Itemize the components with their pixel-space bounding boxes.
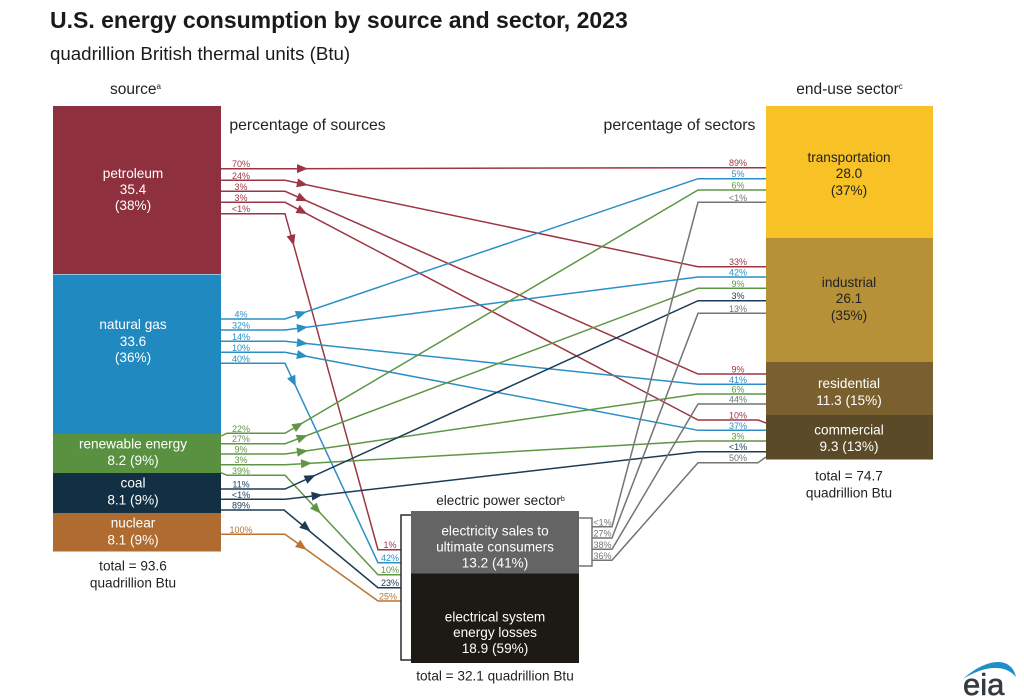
block: transportation: (37%) xyxy=(831,183,867,198)
flow: renewable to residential xyxy=(221,384,766,457)
flow: electricity to transportation: <1% xyxy=(593,517,612,527)
source total: total = 93.6 xyxy=(99,559,167,574)
flow: coal to commercial: <1% xyxy=(232,490,250,500)
flow: petroleum to residential xyxy=(221,182,766,374)
flow: gas to electric power: 40% xyxy=(232,354,250,364)
flow: gas to transportation: 5% xyxy=(731,169,745,179)
block: electrical system energy losses: electrical system xyxy=(445,610,545,624)
flow: electricity to industrial: 27% xyxy=(593,528,612,538)
flow: petroleum to transportation: 70% xyxy=(232,159,250,169)
subtitle: quadrillion British thermal units (Btu) xyxy=(50,43,350,64)
block: natural gas: natural gas xyxy=(99,317,167,332)
block: petroleum: petroleum xyxy=(103,166,163,181)
flow: gas to residential: 14% xyxy=(232,332,250,342)
flow: electricity to industrial xyxy=(592,304,766,538)
block: residential: 11.3 (15%) xyxy=(816,393,882,408)
flow: coal to commercial xyxy=(221,442,766,501)
flow: gas to residential: 41% xyxy=(729,375,747,385)
block: electricity sales: 13.2 (41%) xyxy=(462,556,528,571)
flow: coal to electric power xyxy=(221,500,401,588)
electric power sector heading: b xyxy=(561,496,565,503)
flow: coal to electric power: 23% xyxy=(381,578,399,588)
bracket: electricity sales outflow xyxy=(579,518,592,566)
block: residential: residential xyxy=(818,376,880,391)
block: commercial xyxy=(766,415,933,460)
flow: electricity to industrial: 13% xyxy=(729,304,747,314)
flow: renewable to transportation: 22% xyxy=(232,424,250,434)
flow: coal to electric power: 89% xyxy=(232,500,250,510)
block: industrial: 26.1 xyxy=(836,291,862,306)
flow: petroleum to commercial: 10% xyxy=(729,410,747,420)
flow: gas to industrial: 42% xyxy=(729,268,747,278)
flows: renewable energy xyxy=(221,180,766,575)
flow: petroleum to transportation: 89% xyxy=(729,158,747,168)
flow: electricity to transportation xyxy=(592,193,766,527)
flow: coal to commercial: <1% xyxy=(729,442,747,452)
flow: nuclear to electric power: 25% xyxy=(379,592,397,602)
block: nuclear xyxy=(53,513,221,552)
block: transportation: transportation xyxy=(807,150,891,165)
flow: petroleum to transportation xyxy=(221,158,766,173)
block: industrial xyxy=(766,238,933,362)
block: natural gas xyxy=(53,274,221,434)
flow: gas to industrial xyxy=(221,268,766,333)
block: electrical system energy losses: energy losses xyxy=(453,625,537,640)
flows: electricity sales to sectors xyxy=(579,193,766,566)
flow: gas to commercial xyxy=(221,343,766,431)
block: electrical system energy losses xyxy=(411,574,579,663)
block: renewable energy xyxy=(53,434,221,473)
flow: petroleum to electric power: <1% xyxy=(232,204,250,214)
flow: electricity to transportation: <1% xyxy=(729,193,747,203)
end-use sector column heading: c xyxy=(899,82,903,91)
flow: renewable to residential: 9% xyxy=(234,444,248,454)
flow: petroleum to electric power: 1% xyxy=(383,540,397,550)
flow: petroleum to industrial: 33% xyxy=(729,257,747,267)
block: electricity sales: ultimate consumers xyxy=(436,540,554,555)
source total: quadrillion Btu xyxy=(90,575,176,590)
bracket: electric power sector inflow xyxy=(401,515,411,660)
flow: coal to industrial: 3% xyxy=(731,291,745,301)
block: petroleum: 35.4 xyxy=(120,182,147,197)
source column heading: a xyxy=(157,82,162,91)
block: commercial: 9.3 (13%) xyxy=(820,439,878,454)
panel: electric power sector xyxy=(411,511,579,663)
block: electricity sales xyxy=(411,511,579,574)
flow: renewable to transportation: 6% xyxy=(731,180,745,190)
flow: petroleum to electric power xyxy=(221,204,401,550)
flow: renewable to commercial: 3% xyxy=(731,432,745,442)
block: renewable energy: renewable energy xyxy=(79,436,187,451)
panel: source blocks xyxy=(53,106,221,552)
block: commercial: commercial xyxy=(814,422,884,437)
flow: electricity to commercial: 50% xyxy=(729,453,747,463)
block: renewable energy: 8.2 (9%) xyxy=(107,453,159,468)
flow: renewable to residential: 6% xyxy=(731,384,745,394)
flow: renewable to industrial: 9% xyxy=(731,279,745,289)
flow: electricity to commercial xyxy=(592,453,766,561)
block: industrial: industrial xyxy=(822,275,876,290)
flow: petroleum to commercial xyxy=(221,193,766,423)
flow: electricity to residential: 44% xyxy=(729,394,747,404)
source column heading: source xyxy=(110,81,157,98)
flow: renewable to industrial xyxy=(221,279,766,444)
flow: electricity to residential: 38% xyxy=(593,540,612,550)
block: coal xyxy=(53,473,221,513)
flow: coal to industrial xyxy=(221,291,766,490)
flow: renewable to industrial: 27% xyxy=(232,434,250,444)
end-use total: total = 74.7 xyxy=(815,469,883,484)
block: industrial: (35%) xyxy=(831,308,867,323)
block: residential xyxy=(766,362,933,415)
block: petroleum: (38%) xyxy=(115,198,151,213)
block: nuclear: nuclear xyxy=(111,516,156,531)
flow: renewable to electric power: 10% xyxy=(381,565,399,575)
block: transportation xyxy=(766,106,933,238)
flow: nuclear to electric power xyxy=(221,525,401,602)
block: electrical system energy losses: 18.9 (59%) xyxy=(462,641,528,656)
flows: petroleum xyxy=(221,158,766,550)
flow: gas to residential xyxy=(221,332,766,385)
flow: gas to electric power: 42% xyxy=(381,553,399,563)
flow: petroleum to industrial xyxy=(221,171,766,267)
flow: renewable to transportation xyxy=(221,180,766,436)
block: transportation: 28.0 xyxy=(836,166,863,181)
block: natural gas: (36%) xyxy=(115,350,151,365)
percentage of sources heading: percentage of sources xyxy=(229,117,386,134)
flow: electricity to commercial: 36% xyxy=(593,551,612,561)
flow: renewable to commercial xyxy=(221,432,766,468)
electric power total: total = 32.1 quadrillion Btu xyxy=(416,668,574,684)
flow: gas to electric power xyxy=(221,354,401,563)
flow: renewable to commercial: 3% xyxy=(234,455,248,465)
flow: petroleum to industrial: 24% xyxy=(232,171,250,181)
flow: petroleum to residential: 3% xyxy=(234,182,248,192)
block: coal: 8.1 (9%) xyxy=(107,493,159,508)
flow: gas to transportation xyxy=(221,169,766,320)
block: nuclear: 8.1 (9%) xyxy=(107,532,159,547)
flow: gas to commercial: 37% xyxy=(729,421,747,431)
flow: petroleum to residential: 9% xyxy=(731,364,745,374)
block: petroleum xyxy=(53,106,221,274)
flow: renewable to electric power xyxy=(221,466,401,575)
panel: end-use sector blocks xyxy=(766,106,933,460)
flows: natural gas xyxy=(221,169,766,563)
icon: eia logo xyxy=(963,662,1016,700)
block: coal: coal xyxy=(121,476,145,491)
flow: electricity to residential xyxy=(592,394,766,550)
block: electricity sales: electricity sales to xyxy=(441,524,549,539)
flow: petroleum to commercial: 3% xyxy=(234,193,248,203)
flow: gas to commercial: 10% xyxy=(232,343,250,353)
flows: coal xyxy=(221,291,766,588)
end-use total: quadrillion Btu xyxy=(806,485,892,500)
flow: renewable to electric power: 39% xyxy=(232,466,250,476)
title: U.S. energy consumption by source and sector, 2023 xyxy=(50,7,628,33)
flow: coal to industrial: 11% xyxy=(232,480,250,490)
block: natural gas: 33.6 xyxy=(120,334,146,349)
flow: nuclear to electric power: 100% xyxy=(229,525,253,535)
flow: gas to transportation: 4% xyxy=(234,310,248,320)
end-use sector column heading: end-use sector xyxy=(796,81,899,98)
percentage of sectors heading: percentage of sectors xyxy=(604,117,756,134)
electric power sector heading: electric power sector xyxy=(436,493,561,508)
flow: gas to industrial: 32% xyxy=(232,320,250,330)
